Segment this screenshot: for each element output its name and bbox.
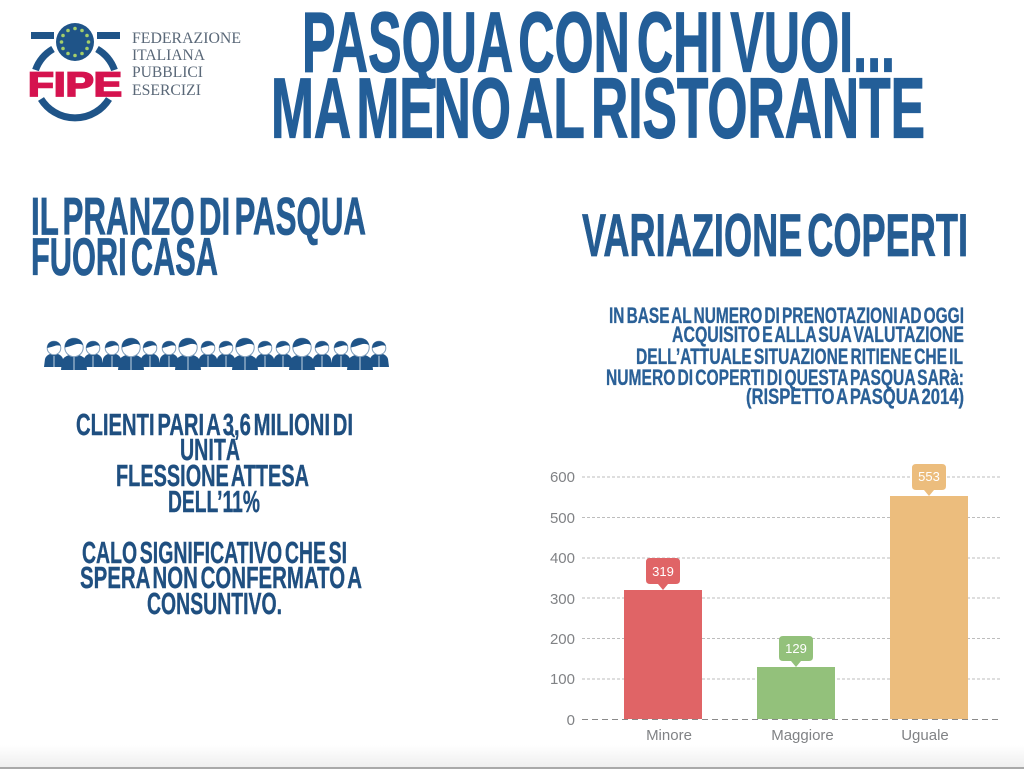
icon: row of people: [44, 338, 389, 370]
y axis labels: 600: [550, 469, 575, 486]
x axis labels: Minore: [646, 727, 692, 744]
text block: calo significativo: CALO SIGNIFICATIVO CHE SI: [82, 535, 347, 570]
y axis labels: 400: [550, 550, 575, 567]
text block: clienti: UNITÀ: [180, 432, 240, 467]
heading: il pranzo di pasqua: FUORI CASA: [31, 228, 218, 287]
text block: clienti: FLESSIONE ATTESA: [116, 458, 309, 493]
text block: calo significativo: [80, 535, 362, 621]
logo text: federation name: ITALIANA: [132, 47, 206, 64]
logo text: federation name: PUBBLICI: [132, 64, 203, 81]
bar: maggiore 129: [757, 636, 835, 719]
bar: minore 319: 319: [652, 564, 674, 579]
logo text: federation name: ESERCIZI: [132, 82, 201, 99]
text block: domanda: [606, 303, 964, 409]
bar chart: [550, 464, 1002, 744]
heading: il pranzo di pasqua: IL PRANZO DI PASQUA: [31, 188, 366, 246]
bar: uguale 553: [890, 464, 968, 719]
y axis labels: 100: [550, 671, 575, 688]
icon: european stars circle: [56, 23, 94, 61]
panel: pranzo di pasqua fuori casa: [31, 188, 389, 621]
y axis labels: [550, 469, 575, 729]
logo text: federation name: [132, 30, 241, 99]
heading: il pranzo di pasqua: [31, 188, 366, 287]
bar: minore 319: [624, 558, 702, 719]
x axis labels: [646, 727, 949, 744]
text block: clienti: DELL’11%: [168, 484, 260, 519]
logo: FIPE: [28, 23, 241, 118]
logo wordmark FIPE: FIPE: [28, 66, 122, 104]
x axis labels: Uguale: [901, 727, 949, 744]
text block: calo significativo: CONSUNTIVO.: [147, 586, 282, 621]
y axis labels: 500: [550, 510, 575, 527]
panel: variazione coperti: [550, 202, 1002, 744]
y axis labels: 300: [550, 591, 575, 608]
title: [271, 0, 925, 156]
bar: maggiore 129: 129: [785, 641, 807, 656]
text block: calo significativo: SPERA NON CONFERMATO A: [80, 560, 362, 595]
logo text: federation name: FEDERAZIONE: [132, 30, 241, 47]
text block: clienti: [76, 407, 353, 519]
x axis labels: Maggiore: [771, 727, 834, 744]
y axis labels: 200: [550, 631, 575, 648]
y axis labels: 0: [567, 712, 575, 729]
bar: uguale 553: 553: [918, 469, 940, 484]
text block: clienti: CLIENTI PARI A 3,6 MILIONI DI: [76, 407, 353, 442]
